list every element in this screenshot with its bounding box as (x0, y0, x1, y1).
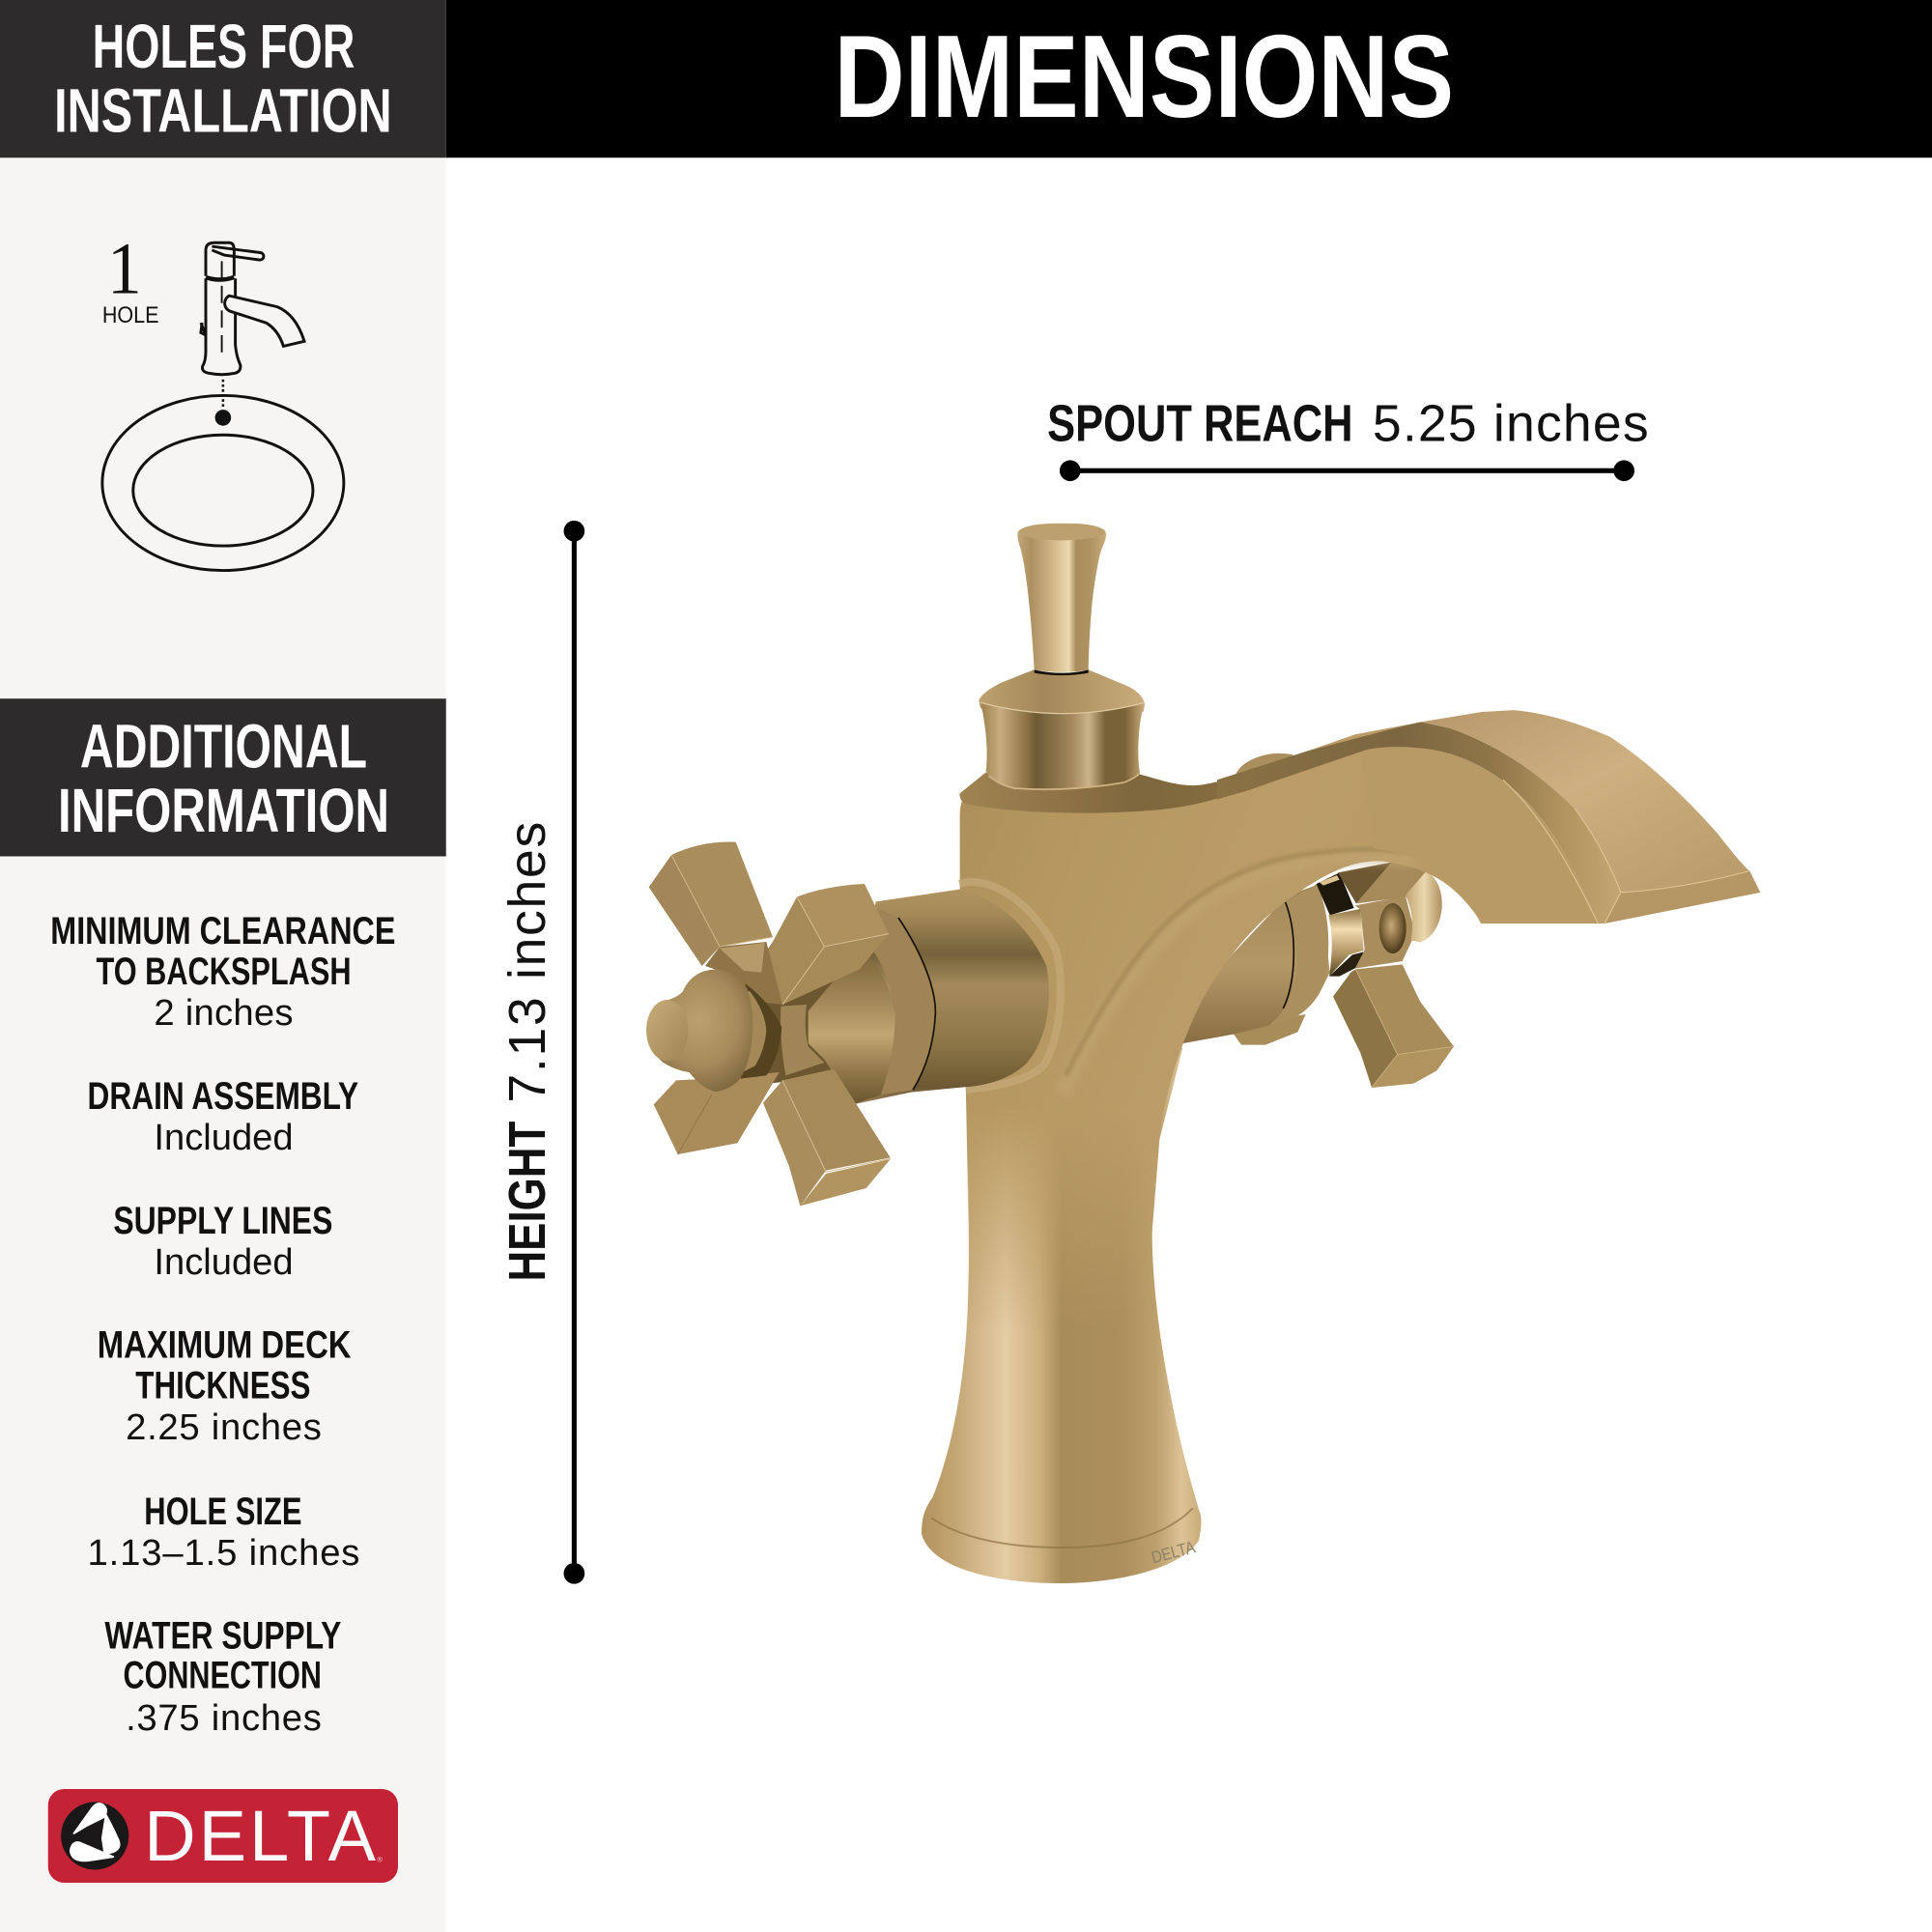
upper right blade (763, 896, 889, 1005)
spec: maximum deck thickness (98, 1324, 352, 1448)
heading: additional information: ADDITIONAL (80, 712, 367, 781)
faucet line drawing (201, 242, 304, 375)
handle backing (751, 911, 895, 1094)
base rim line (931, 1508, 1193, 1548)
label: spout reach (1047, 396, 1649, 453)
logo: delta: DELTA (144, 1796, 377, 1876)
spout highlights (1503, 780, 1749, 923)
logo: delta (48, 1789, 398, 1883)
spec: minimum clearance to backsplash (50, 910, 395, 1034)
title banner: dimensions: DIMENSIONS (835, 11, 1454, 142)
escutcheon ring (959, 882, 1061, 1090)
hub collar (781, 1005, 824, 1075)
sink outlines (102, 395, 344, 571)
heading: holes for installation: HOLES FOR (93, 12, 355, 81)
spec: minimum clearance to backsplash: TO BACKSPLASH (96, 951, 352, 993)
spout chamfer band (1217, 722, 1621, 923)
chamfer behind knob (959, 752, 1314, 813)
left cylinder housing (646, 841, 1061, 1206)
dimension line: spout reach (1060, 460, 1634, 481)
spec: minimum clearance to backsplash: MINIMUM CLEARANCE (50, 910, 395, 952)
spec: water supply connection: .375 inches (126, 1697, 322, 1739)
spec: hole size: HOLE SIZE (144, 1491, 301, 1533)
upper left blade (649, 855, 720, 966)
arch rim shading (1063, 849, 1413, 1094)
spec: supply lines: Included (154, 1241, 294, 1283)
label: spout reach: 5.25 inches (1373, 396, 1649, 453)
spec: water supply connection: CONNECTION (124, 1654, 322, 1696)
spec: hole size: 1.13–1.5 inches (88, 1532, 359, 1574)
column and base (922, 1047, 1201, 1583)
top post knob (979, 524, 1145, 789)
spec: water supply connection: WATER SUPPLY (104, 1615, 341, 1658)
hub cone (809, 950, 895, 1104)
spec: water supply connection (104, 1615, 341, 1739)
dimension line: height (564, 521, 584, 1584)
spec: supply lines: SUPPLY LINES (113, 1200, 332, 1242)
spout lower fill (1360, 747, 1606, 923)
panel: left sidebar (0, 0, 446, 1932)
spout (1217, 710, 1760, 923)
label: height: HEIGHT (499, 1121, 556, 1282)
spec: maximum deck thickness: MAXIMUM DECK (98, 1324, 352, 1367)
hole count label (102, 228, 159, 328)
spec: drain assembly: DRAIN ASSEMBLY (88, 1075, 358, 1118)
hole count label: 1 (107, 228, 142, 310)
back tab (1235, 753, 1297, 780)
head and upper column (960, 723, 1482, 1309)
heading: holes for installation (0, 0, 446, 157)
spec: maximum deck thickness: 2.25 inches (126, 1406, 322, 1448)
hole count label: HOLE (102, 302, 159, 328)
spec: maximum deck thickness: THICKNESS (135, 1365, 310, 1407)
icon: one hole faucet and sink diagram (102, 228, 344, 571)
base engraved logo: DELTA (1150, 1537, 1197, 1567)
spout front face (1421, 710, 1749, 893)
spec: hole size (88, 1491, 359, 1574)
cap dome (647, 969, 753, 1092)
heading: additional information: INFORMATION (58, 776, 389, 845)
lower right blade (763, 1080, 826, 1206)
title banner: dimensions (446, 0, 1932, 157)
spec: drain assembly (88, 1075, 358, 1158)
spec: supply lines (113, 1200, 332, 1283)
logo: delta: ® (377, 1855, 383, 1863)
label: height (499, 822, 556, 1282)
product image: faucet (646, 524, 1760, 1583)
label: height: 7.13 inches (499, 822, 556, 1103)
heading: additional information (0, 698, 446, 856)
label: spout reach: SPOUT REACH (1047, 396, 1353, 453)
rear handle (1179, 863, 1454, 1088)
cap neck (741, 983, 781, 1079)
spec: drain assembly: Included (154, 1117, 294, 1158)
sink hole (215, 410, 231, 426)
spout tip (1605, 871, 1760, 923)
cylinder (853, 890, 1049, 1104)
lower left blade (654, 1072, 780, 1154)
dotted connector (222, 380, 224, 409)
spec: minimum clearance to backsplash: 2 inches (154, 992, 294, 1034)
heading: holes for installation: INSTALLATION (54, 75, 392, 145)
ring band (872, 908, 935, 1094)
